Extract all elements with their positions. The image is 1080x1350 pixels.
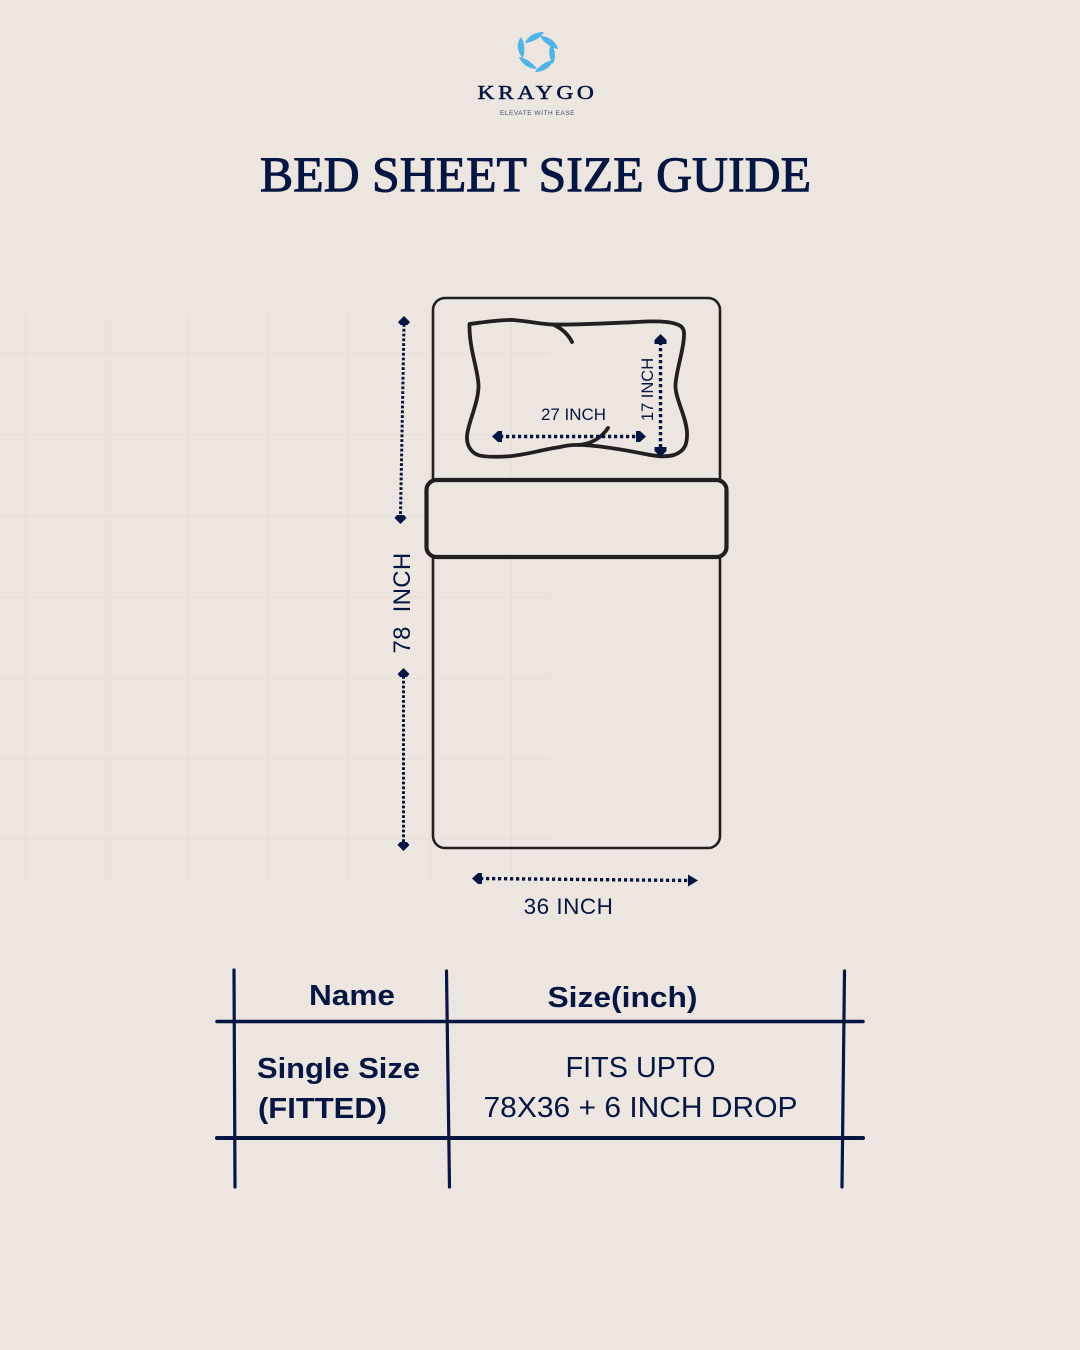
pillow xyxy=(467,320,687,457)
wordmark: KRAYGO xyxy=(478,83,598,104)
row name xyxy=(257,1053,420,1125)
bed frame xyxy=(433,298,720,848)
pillow width label: 27 INCH xyxy=(541,406,606,424)
bed width arrow xyxy=(472,873,698,886)
header: size: Size(inch) xyxy=(548,982,698,1014)
row name: Single Size xyxy=(257,1053,420,1085)
pillow width arrow xyxy=(492,431,646,442)
row size: 78X36 + 6 INCH DROP xyxy=(484,1092,798,1124)
fold band xyxy=(426,480,726,557)
pillow height arrow xyxy=(654,334,666,457)
size table xyxy=(217,970,863,1187)
row name: (FITTED) xyxy=(258,1093,387,1125)
header: name: Name xyxy=(309,980,395,1012)
bed length arrow lower xyxy=(398,668,410,851)
table lines xyxy=(217,970,863,1187)
tagline: ELEVATE WITH EASE xyxy=(500,110,575,117)
title: BED SHEET SIZE GUIDE xyxy=(260,146,811,202)
bed length arrow upper xyxy=(394,316,410,524)
logo: Kraygo xyxy=(478,32,598,117)
pillow height label: 17 INCH xyxy=(639,358,657,421)
bed diagram xyxy=(389,298,726,919)
row size xyxy=(484,1052,798,1124)
bed width label: 36 INCH xyxy=(524,894,613,919)
icon: blue leaf ring xyxy=(518,32,558,72)
row size: FITS UPTO xyxy=(566,1052,716,1084)
bed length label: 78 INCH xyxy=(389,552,416,654)
